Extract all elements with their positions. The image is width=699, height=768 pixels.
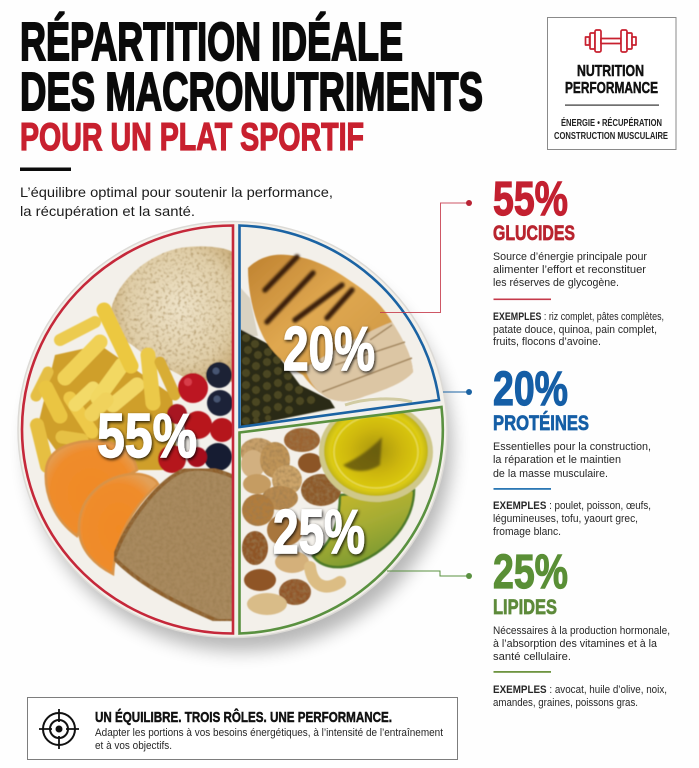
badge title: NUTRITION	[577, 63, 644, 80]
grilled chicken	[248, 255, 413, 401]
examples: légumineuses, tofu, yaourt grec,	[493, 513, 638, 525]
plate labels: 55%	[97, 402, 197, 471]
description	[493, 625, 670, 663]
berries	[158, 362, 234, 473]
plate labels: 20%	[283, 315, 375, 384]
logo badge	[548, 18, 676, 150]
callout: footer	[28, 698, 458, 760]
examples	[493, 684, 667, 709]
subtitle	[20, 184, 333, 219]
description: à l’absorption des vitamines et à la	[493, 638, 658, 650]
connector: proteins	[443, 389, 472, 395]
title: DES MACRONUTRIMENTS	[20, 62, 483, 122]
nuts	[240, 428, 341, 615]
description	[493, 441, 651, 480]
examples: EXEMPLES : poulet, poisson, œufs,	[493, 500, 651, 512]
subtitle: L’équilibre optimal pour soutenir la performance,	[20, 184, 333, 200]
panel: lipids food	[240, 402, 433, 615]
callout text: et à vos objectifs.	[95, 740, 172, 752]
badge title	[565, 63, 658, 97]
title: RÉPARTITION IDÉALE	[20, 12, 403, 72]
rice	[110, 246, 236, 382]
sweet potato slices	[46, 441, 158, 574]
examples: fromage blanc.	[493, 526, 561, 538]
heading: protéines: PROTÉINES	[493, 412, 589, 435]
olive oil bowl	[319, 402, 433, 502]
description: Essentielles pour la construction,	[493, 441, 651, 453]
connector: carbohydrates	[380, 200, 472, 312]
badge tagline: ÉNERGIE • RÉCUPÉRATION	[561, 116, 662, 129]
description: alimenter l’effort et reconstituer	[493, 264, 646, 276]
title: POUR UN PLAT SPORTIF	[20, 116, 364, 159]
title	[20, 12, 483, 159]
plate	[18, 222, 452, 651]
panel: proteins food	[238, 255, 413, 428]
description: santé cellulaire.	[493, 651, 571, 663]
percent: 55: 55%	[493, 173, 568, 226]
examples	[493, 311, 664, 348]
lentils	[238, 328, 335, 428]
description: de la masse musculaire.	[493, 468, 608, 480]
examples: fruits, flocons d’avoine.	[493, 336, 601, 348]
examples	[493, 500, 651, 538]
callout text	[95, 727, 443, 752]
oil bowl overlap	[345, 399, 412, 405]
description: Source d’énergie principale pour	[493, 251, 647, 263]
percent: 25: 25%	[493, 546, 568, 599]
callout heading: UN ÉQUILIBRE. TROIS RÔLES. UNE PERFORMANCE.	[95, 708, 392, 726]
panel: glucides	[493, 173, 664, 348]
title divider	[20, 168, 71, 171]
description	[493, 251, 647, 289]
icon: dumbbell	[586, 30, 636, 52]
description: les réserves de glycogène.	[493, 277, 619, 289]
badge tagline	[554, 116, 668, 142]
plate labels	[97, 315, 375, 567]
pasta	[36, 310, 178, 470]
bread	[114, 469, 236, 621]
outline: carbohydrates	[22, 226, 233, 634]
connector: lipids	[387, 571, 472, 579]
percent: 20: 20%	[493, 363, 568, 416]
plate outlines	[22, 226, 443, 634]
badge title: PERFORMANCE	[565, 80, 658, 97]
callout text: Adapter les portions à vos besoins énergétiques, à l’intensité de l’entraînement	[95, 727, 443, 739]
examples: EXEMPLES : riz complet, pâtes complètes,	[493, 311, 664, 323]
rice edge	[241, 288, 258, 337]
plate labels: 25%	[273, 498, 365, 567]
panel: carbohydrates food	[36, 246, 236, 621]
icon: target	[39, 709, 79, 749]
examples: EXEMPLES : avocat, huile d’olive, noix,	[493, 684, 667, 696]
description: Nécessaires à la production hormonale,	[493, 625, 670, 637]
subtitle: la récupération et la santé.	[20, 203, 195, 219]
examples: patate douce, quinoa, pain complet,	[493, 324, 657, 336]
heading: glucides: GLUCIDES	[493, 222, 575, 245]
panel: lipides	[493, 546, 670, 709]
panel: protéines	[493, 363, 651, 538]
description: la réparation et le maintien	[493, 454, 621, 466]
heading: lipides: LIPIDES	[493, 596, 557, 619]
outline: proteins	[240, 226, 439, 427]
outline: lipids	[240, 407, 443, 634]
examples: amandes, graines, poissons gras.	[493, 697, 638, 709]
avocado	[313, 490, 414, 567]
